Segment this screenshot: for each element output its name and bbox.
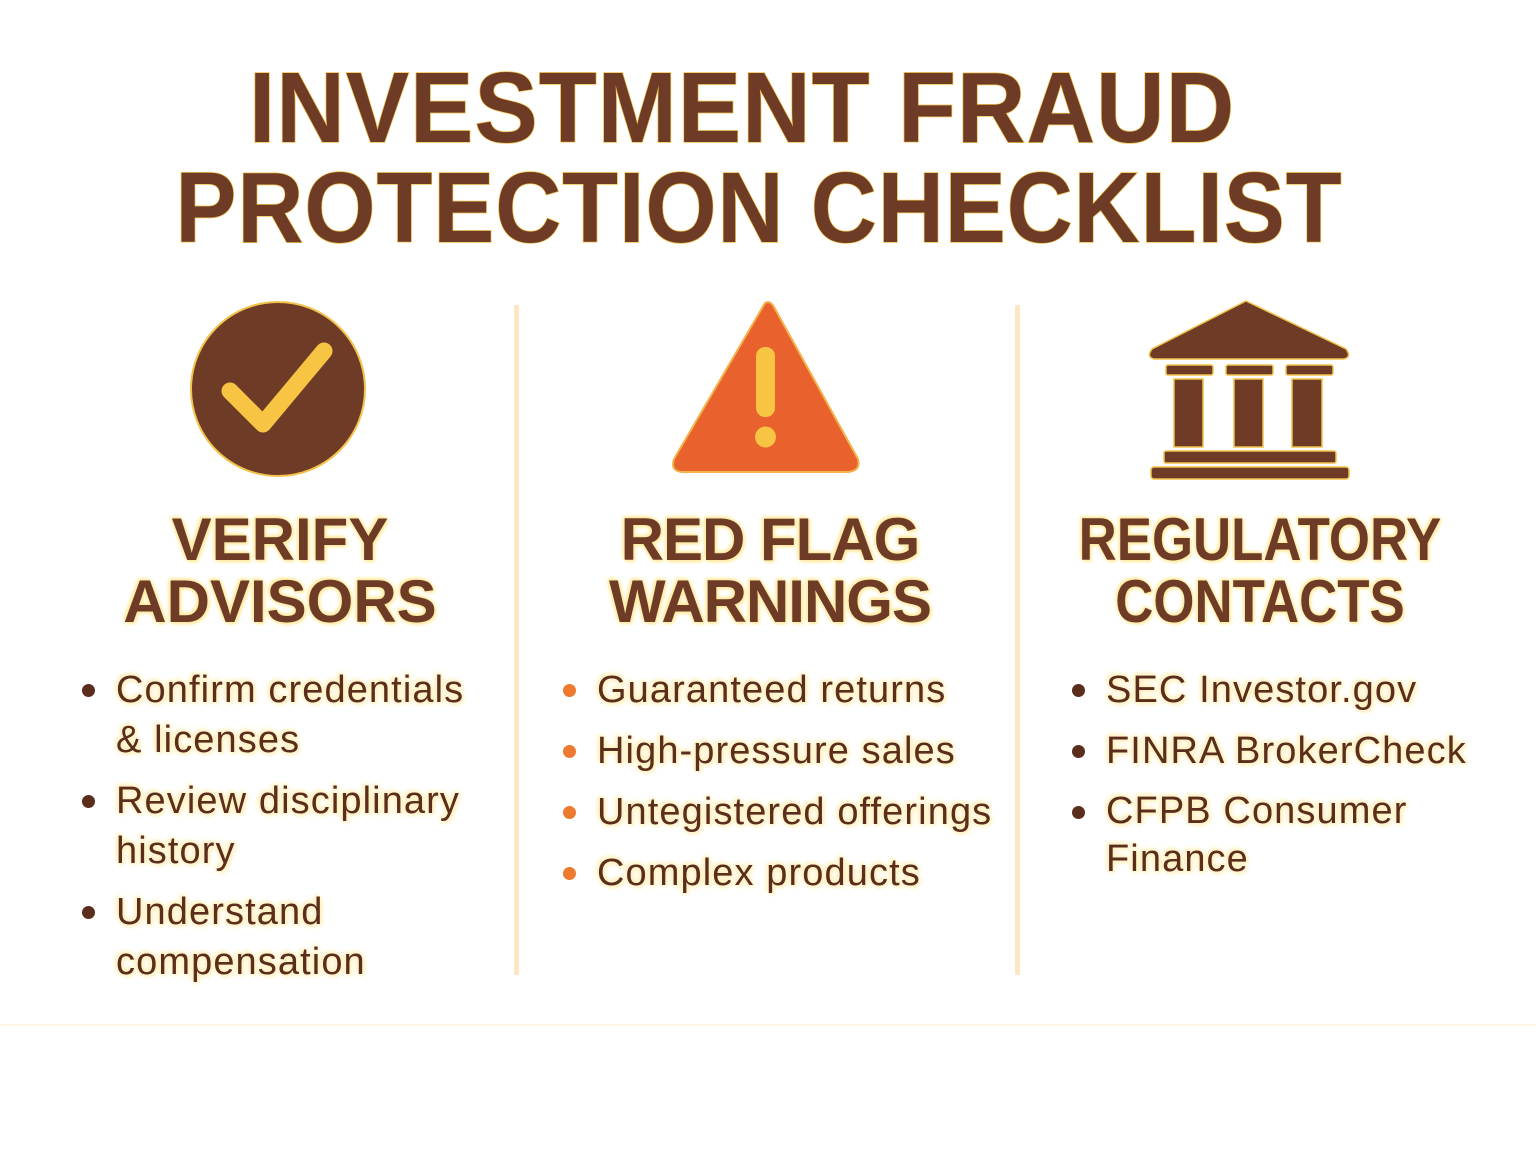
heading: [606, 506, 934, 635]
title: PROTECTION CHECKLIST: [175, 152, 1343, 264]
bullet list: Finance: [1106, 838, 1249, 880]
bullet list: history: [116, 830, 236, 872]
panel: red flag warnings: [563, 301, 994, 897]
bullet list: [82, 669, 466, 986]
icon: bank building: [1148, 300, 1350, 480]
heading: WARNINGS: [609, 568, 931, 635]
bullet list: [563, 669, 994, 897]
bullet list: CFPB Consumer: [1106, 790, 1408, 832]
icon: check circle: [190, 301, 366, 477]
bullet list: Guaranteed returns: [597, 669, 946, 711]
bullet list: [1072, 669, 1469, 880]
heading: [121, 506, 438, 635]
heading: RED FLAG: [621, 506, 919, 573]
heading: [1078, 506, 1443, 635]
title: [175, 52, 1343, 264]
bullet list: Understand: [116, 891, 323, 933]
bullet list: High-pressure sales: [597, 730, 956, 772]
bullet list: FINRA BrokerCheck: [1106, 730, 1467, 772]
title: INVESTMENT FRAUD: [249, 52, 1235, 164]
bullet list: compensation: [116, 941, 366, 983]
bullet list: Confirm credentials: [116, 669, 464, 711]
bullet list: SEC Investor.gov: [1106, 669, 1417, 711]
bullet list: & licenses: [116, 719, 300, 761]
heading: CONTACTS: [1115, 568, 1405, 635]
icon: warning triangle: [672, 301, 860, 473]
bullet list: Complex products: [597, 852, 921, 894]
panel: verify advisors: [82, 301, 466, 986]
heading: VERIFY: [172, 506, 388, 573]
bullet list: Review disciplinary: [116, 780, 460, 822]
heading: ADVISORS: [123, 568, 437, 635]
bullet list: Untegistered offerings: [597, 791, 992, 833]
heading: REGULATORY: [1079, 506, 1441, 573]
panel: regulatory contacts: [1072, 300, 1469, 880]
